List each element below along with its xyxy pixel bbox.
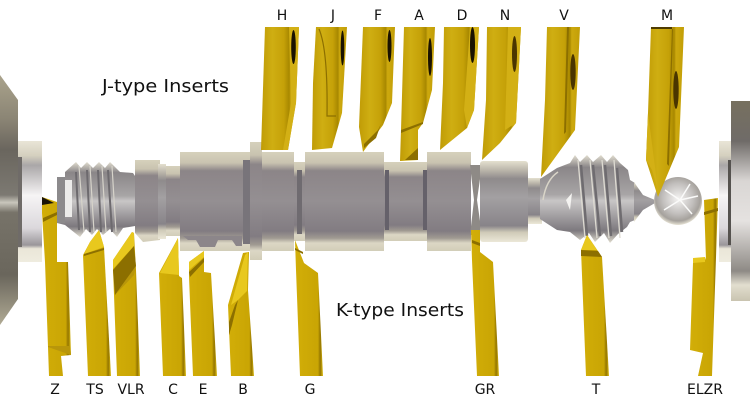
J-type insert D: [440, 27, 479, 150]
K-type insert G: [295, 240, 323, 376]
slot: [341, 30, 344, 66]
top labels: J: [330, 8, 335, 24]
bottom labels: E: [199, 382, 207, 398]
workpiece shaft assembly: [0, 75, 750, 325]
right flange: [719, 141, 731, 262]
bottom labels: C: [168, 382, 178, 398]
J-type insert A: [400, 27, 435, 161]
J-type insert M: [646, 27, 684, 197]
right threaded section: [540, 155, 635, 243]
top labels: D: [457, 8, 467, 24]
top labels: [277, 8, 673, 24]
bottom labels: T: [591, 382, 601, 398]
left flange: [18, 141, 42, 262]
slot: [291, 30, 296, 64]
bottom labels: [50, 382, 723, 398]
K-type insert TS: [83, 230, 111, 376]
bottom labels: VLR: [117, 382, 145, 398]
left threaded section: [57, 162, 135, 237]
left chuck body: [0, 75, 18, 325]
bottom labels: B: [238, 382, 248, 398]
heading: J-type Inserts: J-type Inserts: [101, 76, 229, 97]
heading: K-type Inserts: K-type Inserts: [336, 300, 464, 321]
J-type insert J: [312, 27, 347, 150]
K-type insert ELZR: [690, 198, 718, 376]
top labels: H: [277, 8, 287, 24]
J-type insert V: [541, 27, 580, 177]
J-type insert F: [359, 27, 395, 152]
right disk: [731, 101, 750, 301]
K-type insert B: [228, 252, 254, 376]
J-type insert N: [482, 27, 521, 160]
slot: [673, 71, 679, 109]
bottom labels: TS: [85, 382, 104, 398]
slot: [428, 38, 432, 76]
top labels: V: [559, 8, 569, 24]
top labels: F: [374, 8, 382, 24]
top labels: N: [500, 8, 510, 24]
J-type insert H: [261, 27, 299, 150]
bottom labels: G: [305, 382, 315, 398]
bottom labels: Z: [50, 382, 60, 398]
bottom labels: ELZR: [687, 382, 723, 398]
slot: [388, 30, 392, 62]
K-type insert GR: [471, 230, 499, 376]
top labels: A: [414, 8, 424, 24]
slot: [512, 36, 517, 72]
K-type insert VLR: [113, 232, 140, 376]
K-type insert Z: [42, 197, 71, 376]
neck: [634, 182, 665, 222]
bottom labels: GR: [475, 382, 496, 398]
K-type insert C: [159, 238, 186, 376]
K-type insert T: [581, 235, 609, 376]
ball end: [654, 177, 702, 225]
K-type insert E: [189, 251, 217, 376]
slot: [470, 27, 475, 63]
slot: [570, 54, 576, 90]
shaft step sections: [135, 142, 542, 260]
top labels: M: [661, 8, 673, 24]
